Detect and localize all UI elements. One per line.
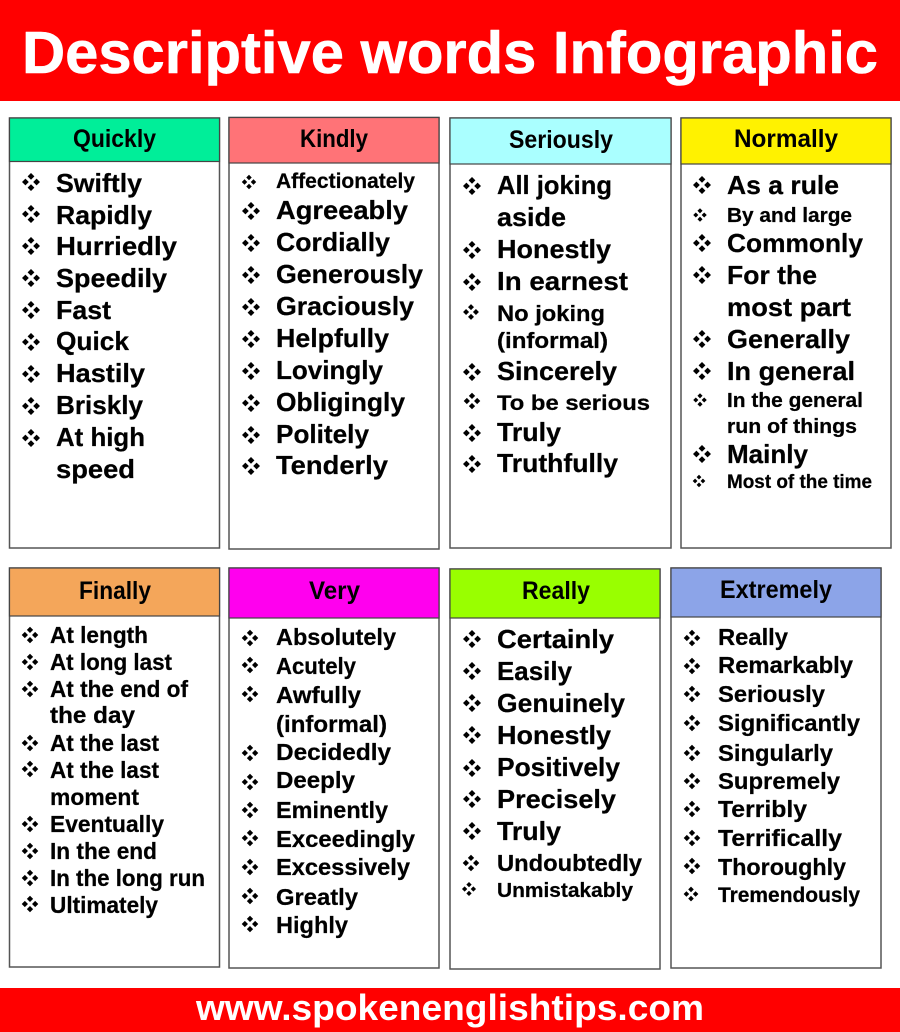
word list: Normally: run of things — [727, 416, 857, 438]
word list: Finally: In the end — [50, 838, 157, 864]
word list: Extremely: Supremely — [718, 768, 840, 794]
word list: Kindly: Agreeably — [276, 195, 409, 225]
word list: Very: Highly — [276, 912, 348, 938]
word list: Finally: moment — [50, 784, 139, 810]
word list: Quickly: Quick — [56, 326, 130, 356]
word list: Very — [242, 624, 415, 938]
title banner: Descriptive words Infographic — [22, 20, 878, 86]
word list: Normally: For the — [727, 260, 817, 290]
word list: Extremely: Seriously — [718, 681, 825, 707]
word list: Very: (informal) — [276, 711, 387, 737]
word list: Kindly: Helpfully — [276, 323, 390, 353]
word list: Normally: most part — [727, 292, 851, 322]
panel: Very — [229, 568, 439, 968]
word list: Very: Excessively — [276, 854, 410, 880]
word list: Seriously: In earnest — [497, 266, 628, 296]
word list: Normally: Most of the time — [727, 472, 872, 493]
title banner — [0, 0, 900, 101]
word list: Really — [462, 624, 642, 902]
word list: Finally: At the last — [50, 757, 159, 783]
header: Seriously — [450, 118, 671, 164]
word list: Seriously: (informal) — [497, 328, 608, 353]
word list: Very: Awfully — [276, 682, 361, 708]
header: Very: Very — [309, 577, 360, 605]
word list: Really: Positively — [497, 752, 621, 782]
word list: Kindly: Graciously — [276, 291, 415, 321]
header: Normally: Normally — [734, 125, 838, 153]
word list: Seriously: Truthfully — [497, 448, 619, 478]
word list: Extremely: Really — [718, 624, 788, 650]
word list: Kindly: Affectionately — [276, 170, 415, 193]
word list: Kindly — [242, 170, 424, 480]
word list: Finally: At the last — [50, 730, 159, 756]
word list: Normally: Commonly — [727, 228, 864, 258]
header: Kindly — [229, 118, 439, 163]
word list: Seriously: Honestly — [497, 234, 612, 264]
word list: Really: Undoubtedly — [497, 850, 642, 876]
word list: Quickly — [22, 168, 178, 484]
word list: Really: Unmistakably — [497, 879, 634, 902]
word list: Quickly: Swiftly — [56, 168, 143, 198]
word list: Really: Certainly — [497, 624, 615, 654]
word list: Very: Decidedly — [276, 739, 391, 765]
word list: Finally: Eventually — [50, 811, 164, 837]
word list: Extremely: Terribly — [718, 796, 807, 822]
word list: Very: Acutely — [276, 653, 356, 679]
word list: Kindly: Tenderly — [276, 450, 389, 480]
header: Quickly: Quickly — [73, 125, 156, 153]
word list: Kindly: Cordially — [276, 227, 391, 257]
word list: Really: Precisely — [497, 784, 617, 814]
panel: Seriously — [450, 118, 671, 548]
word list: Very: Eminently — [276, 797, 388, 823]
word list: Quickly: Briskly — [56, 390, 144, 420]
word list: Normally: As a rule — [727, 170, 839, 200]
word list: Kindly: Obligingly — [276, 387, 406, 417]
word list: Quickly: Fast — [56, 295, 111, 325]
word list: Very: Greatly — [276, 884, 358, 910]
header: Extremely: Extremely — [720, 576, 832, 604]
word list: Quickly: speed — [56, 454, 135, 484]
word list: Finally: Ultimately — [50, 892, 158, 918]
word list: Quickly: At high — [56, 422, 145, 452]
word list: Kindly: Generously — [276, 259, 424, 289]
word list: Really: Truly — [497, 816, 562, 846]
word list: Finally: the day — [50, 702, 135, 728]
word list: Normally: Generally — [727, 324, 851, 354]
word list: Quickly: Speedily — [56, 263, 168, 293]
header: Really: Really — [522, 577, 590, 605]
word list: Extremely — [684, 624, 860, 907]
word list: Extremely: Thoroughly — [718, 854, 846, 880]
word list: Seriously: Sincerely — [497, 356, 618, 386]
word list: Finally: In the long run — [50, 865, 205, 891]
header: Extremely — [671, 568, 881, 617]
panel: Normally — [681, 118, 891, 548]
word list: Kindly: Politely — [276, 419, 370, 449]
word list: Finally: At length — [50, 622, 148, 648]
header: Really — [450, 569, 660, 618]
footer banner — [0, 987, 900, 1032]
word list: Extremely: Singularly — [718, 740, 833, 766]
word list: Seriously: To be serious — [497, 392, 650, 415]
word list: Seriously — [463, 170, 650, 478]
footer banner: www.spokenenglishtips.com — [195, 987, 704, 1028]
header: Kindly: Kindly — [300, 125, 368, 153]
word list: Normally: By and large — [727, 205, 852, 227]
word list: Seriously: All joking — [497, 170, 612, 200]
header: Seriously: Seriously — [509, 126, 613, 154]
word list: Quickly: Rapidly — [56, 200, 153, 230]
word list: Quickly: Hurriedly — [56, 231, 178, 261]
word list: Extremely: Remarkably — [718, 652, 853, 678]
word list: Finally: At the end of — [50, 676, 188, 702]
word list: Quickly: Hastily — [56, 358, 146, 388]
word list: Very: Exceedingly — [276, 826, 415, 852]
word list: Normally — [693, 170, 872, 493]
panel: Really — [450, 569, 660, 969]
word list: Normally: In the general — [727, 390, 863, 412]
word list: Extremely: Tremendously — [718, 884, 860, 907]
header: Very — [229, 568, 439, 618]
header: Finally: Finally — [79, 577, 151, 605]
panel: Quickly — [10, 118, 220, 548]
word list: Very: Deeply — [276, 767, 355, 793]
header: Normally — [681, 118, 891, 164]
header: Quickly — [10, 118, 220, 162]
panel: Finally — [10, 568, 220, 967]
word list: Finally: At long last — [50, 649, 172, 675]
panel: Kindly — [229, 118, 439, 549]
word list: Normally: In general — [727, 356, 855, 386]
word list: Really: Genuinely — [497, 688, 626, 718]
word list: Seriously: Truly — [497, 417, 562, 447]
word list: Extremely: Significantly — [718, 710, 860, 736]
word list: Seriously: aside — [497, 202, 566, 232]
word list: Very: Absolutely — [276, 624, 396, 650]
panel: Extremely — [671, 568, 881, 968]
word list: Normally: Mainly — [727, 439, 809, 469]
word list: Seriously: No joking — [497, 301, 605, 326]
word list: Really: Honestly — [497, 720, 612, 750]
word list: Kindly: Lovingly — [276, 355, 384, 385]
word list: Finally — [22, 622, 205, 918]
header: Finally — [10, 568, 220, 616]
word list: Really: Easily — [497, 656, 573, 686]
word list: Extremely: Terrifically — [718, 825, 842, 851]
